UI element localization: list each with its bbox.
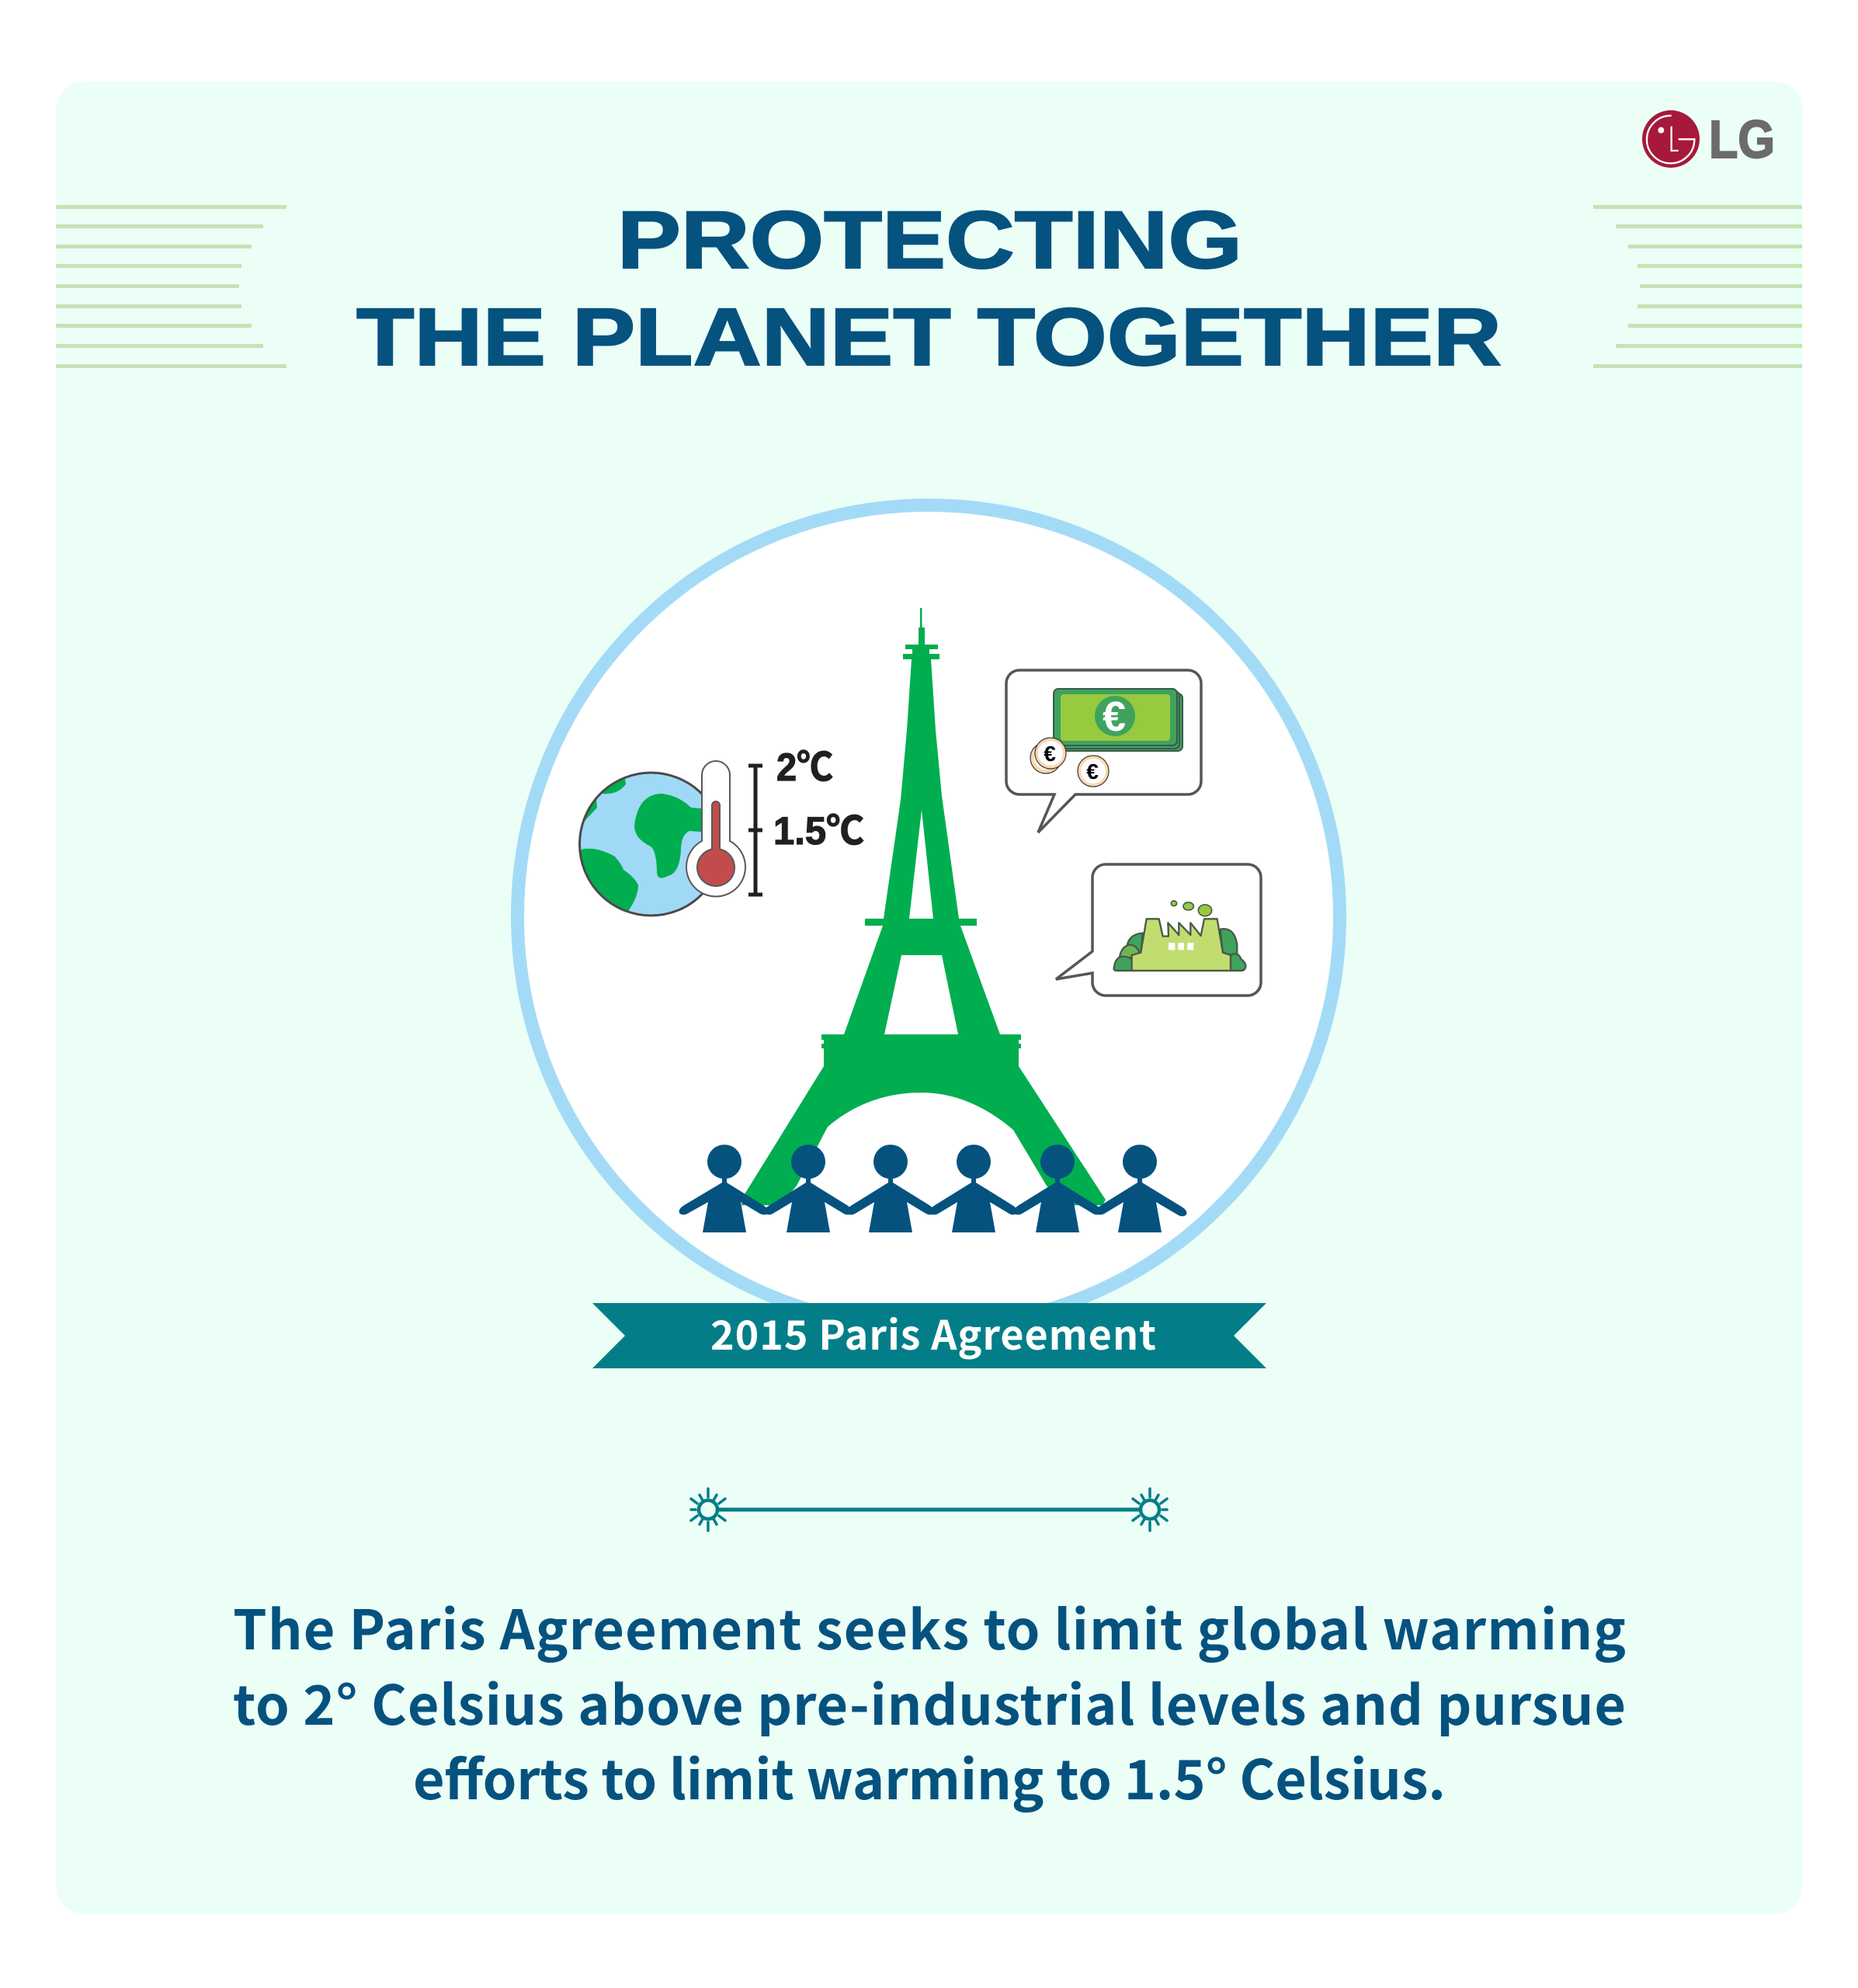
eiffel tower bbox=[741, 608, 1106, 1205]
body text: to 2° Celsius above pre-industrial levels and pursue bbox=[233, 1663, 1626, 1741]
divider with suns bbox=[691, 1489, 1167, 1531]
decorative stripes: left bbox=[56, 205, 287, 368]
icon: globe bbox=[578, 772, 703, 916]
people holding hands bbox=[679, 1145, 1186, 1232]
temperature scale bbox=[748, 766, 762, 895]
icon: coins bbox=[1030, 738, 1109, 787]
icon: factory with trees bbox=[1114, 901, 1245, 971]
icon: thermometer bbox=[686, 761, 745, 896]
title bbox=[356, 195, 1502, 383]
banner text: 2015 Paris Agreement bbox=[710, 1303, 1156, 1361]
body text: The Paris Agreement seeks to limit global warming bbox=[233, 1587, 1626, 1666]
speech bubble: factory bbox=[1056, 864, 1261, 996]
body text bbox=[233, 1587, 1626, 1816]
label: 1.5 degrees: 1.5℃ bbox=[773, 809, 864, 853]
label: 2 degrees: 2℃ bbox=[776, 746, 833, 789]
icon: coins: € bbox=[1086, 759, 1099, 784]
decorative stripes: right bbox=[1593, 205, 1802, 368]
banner bbox=[592, 1303, 1266, 1368]
title: PROTECTING bbox=[617, 195, 1242, 286]
icon: banknotes bbox=[1054, 689, 1183, 751]
title: THE PLANET TOGETHER bbox=[356, 292, 1502, 383]
icon: coins: € bbox=[1044, 742, 1056, 766]
logo: LG: LG bbox=[1709, 109, 1775, 169]
logo: LG bbox=[1642, 109, 1775, 169]
speech bubble: money bbox=[1006, 670, 1201, 832]
body text: efforts to limit warming to 1.5° Celsius. bbox=[413, 1737, 1446, 1816]
circle bbox=[517, 505, 1340, 1328]
icon: banknotes: € bbox=[1103, 693, 1126, 740]
